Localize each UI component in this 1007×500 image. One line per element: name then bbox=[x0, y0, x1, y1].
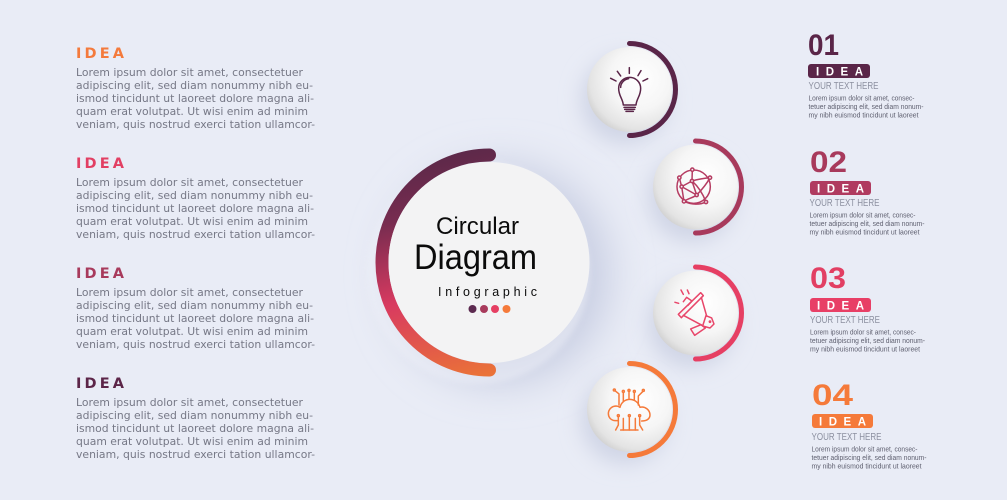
central circular diagram bbox=[366, 155, 610, 384]
text block: idea 3: quam erat volutpat. Ut wisi enim ad minim bbox=[76, 325, 308, 338]
legend item 02: my nibh euismod tincidunt ut laoreet bbox=[810, 230, 920, 236]
legend item 01 bbox=[808, 29, 924, 120]
legend item 02 bbox=[810, 146, 925, 236]
text block: idea 4: veniam, quis nostrud exerci tation ullamcor- bbox=[76, 448, 315, 461]
text block: idea 3: IDEA bbox=[76, 266, 125, 282]
text block: idea 1: veniam, quis nostrud exerci tation ullamcor- bbox=[76, 118, 315, 131]
text block: idea 1: ismod tincidunt ut laoreet dolore magna ali- bbox=[76, 92, 314, 105]
text block: idea 2: adipiscing elit, sed diam nonummy nibh eu- bbox=[76, 189, 313, 202]
color dots bbox=[468, 305, 510, 313]
text block: idea 3 bbox=[76, 266, 315, 351]
legend item 03: my nibh euismod tincidunt ut laoreet bbox=[810, 346, 920, 354]
text block: idea 2: Lorem ipsum dolor sit amet, consectetuer bbox=[76, 176, 303, 189]
text block: idea 2: veniam, quis nostrud exerci tation ullamcor- bbox=[76, 228, 315, 241]
central disc bbox=[388, 162, 590, 363]
text block: idea 3: Lorem ipsum dolor sit amet, consectetuer bbox=[76, 286, 303, 299]
badge: IDEA bbox=[819, 416, 866, 428]
badge: IDEA bbox=[817, 184, 864, 196]
text block: idea 2: ismod tincidunt ut laoreet dolore magna ali- bbox=[76, 202, 314, 215]
legend item 04: YOUR TEXT HERE bbox=[812, 432, 882, 443]
legend item 03: Lorem ipsum dolor sit amet, consec- bbox=[810, 330, 917, 336]
text block: idea 4: IDEA bbox=[76, 376, 125, 392]
legend item 04: 04 bbox=[812, 379, 853, 412]
icon: lightbulb bbox=[611, 68, 648, 111]
legend item 02: Lorem ipsum dolor sit amet, consec- bbox=[810, 212, 916, 220]
panel: right legend column bbox=[808, 29, 927, 470]
legend item 01: tetuer adipiscing elit, sed diam nonum- bbox=[808, 104, 924, 111]
legend item 04: tetuer adipiscing elit, sed diam nonum- bbox=[812, 455, 927, 462]
node 2: globe network sphere bbox=[648, 141, 742, 242]
text block: idea 3: veniam, quis nostrud exerci tation ullamcor- bbox=[76, 338, 315, 351]
legend item 02: 02 bbox=[810, 146, 847, 179]
legend item 01: YOUR TEXT HERE bbox=[808, 81, 879, 92]
text block: idea 4: ismod tincidunt ut laoreet dolore magna ali- bbox=[76, 422, 314, 435]
legend item 01: my nibh euismod tincidunt ut laoreet bbox=[808, 112, 919, 120]
icon: megaphone bbox=[675, 290, 714, 335]
central title: Circular bbox=[436, 213, 519, 240]
text block: idea 2 bbox=[76, 156, 315, 241]
central title bbox=[414, 213, 537, 299]
legend item 03: 03 bbox=[810, 262, 846, 295]
text block: idea 2: IDEA bbox=[76, 156, 125, 172]
text block: idea 4 bbox=[76, 376, 315, 461]
icon: globe network bbox=[677, 168, 712, 204]
text block: idea 4: quam erat volutpat. Ut wisi enim ad minim bbox=[76, 435, 308, 448]
central title: Infographic bbox=[438, 285, 537, 299]
text block: idea 1: IDEA bbox=[76, 46, 125, 62]
legend item 02: tetuer adipiscing elit, sed diam nonum- bbox=[810, 221, 925, 228]
text block: idea 4: adipiscing elit, sed diam nonummy nibh eu- bbox=[76, 409, 313, 422]
legend item 03: YOUR TEXT HERE bbox=[810, 315, 880, 326]
central title: Diagram bbox=[414, 238, 537, 277]
node 4: cloud circuit sphere bbox=[581, 364, 676, 464]
legend item 03: tetuer adipiscing elit, sed diam nonum- bbox=[810, 338, 926, 345]
text block: idea 3: adipiscing elit, sed diam nonummy nibh eu- bbox=[76, 299, 313, 312]
text block: idea 1: quam erat volutpat. Ut wisi enim ad minim bbox=[76, 105, 308, 118]
legend item 02: YOUR TEXT HERE bbox=[810, 198, 880, 209]
text block: idea 2: quam erat volutpat. Ut wisi enim ad minim bbox=[76, 215, 308, 228]
badge: IDEA bbox=[817, 300, 864, 312]
legend item 04: my nibh euismod tincidunt ut laoreet bbox=[812, 464, 922, 470]
text block: idea 1: adipiscing elit, sed diam nonummy nibh eu- bbox=[76, 79, 313, 92]
text block: idea 3: ismod tincidunt ut laoreet dolore magna ali- bbox=[76, 312, 314, 325]
text block: idea 4: Lorem ipsum dolor sit amet, consectetuer bbox=[76, 396, 303, 409]
legend item 01: Lorem ipsum dolor sit amet, consec- bbox=[808, 96, 915, 102]
legend item 04 bbox=[812, 379, 927, 470]
legend item 04: Lorem ipsum dolor sit amet, consec- bbox=[812, 446, 918, 454]
node 3: megaphone sphere bbox=[648, 267, 742, 368]
central gradient ring bbox=[382, 155, 490, 370]
node 1: lightbulb sphere bbox=[581, 44, 676, 144]
badge: IDEA bbox=[816, 66, 863, 78]
legend item 03 bbox=[810, 262, 926, 354]
text block: idea 1 bbox=[76, 46, 315, 131]
text block: idea 1: Lorem ipsum dolor sit amet, consectetuer bbox=[76, 66, 303, 79]
icon: cloud circuit bbox=[608, 389, 650, 430]
legend item 01: 01 bbox=[808, 29, 839, 62]
panel: left text column bbox=[76, 46, 315, 461]
